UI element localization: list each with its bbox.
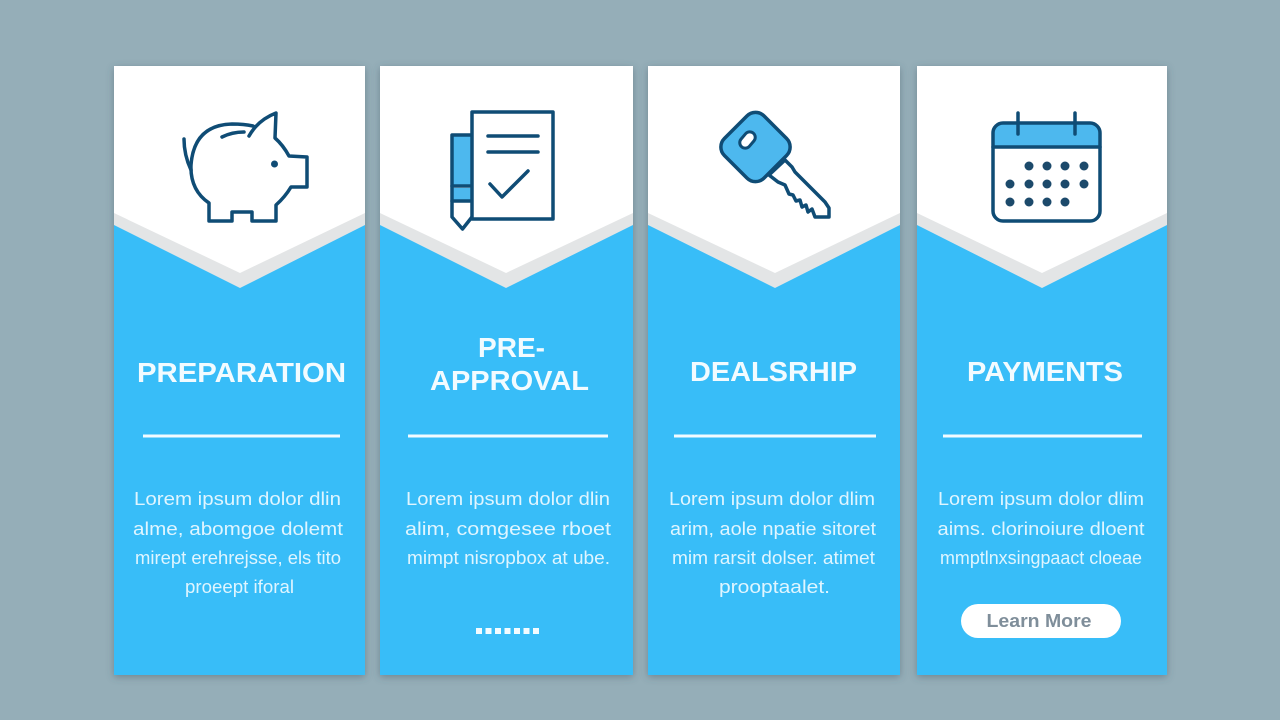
body text: alme, abomgoe dolemt [133, 519, 343, 539]
heading: pre-approval: APPROVAL [430, 365, 589, 396]
divider [674, 434, 876, 438]
chevron header [380, 66, 633, 273]
heading: pre-approval: PRE- [478, 332, 545, 363]
body text [133, 489, 343, 597]
card background [648, 66, 900, 675]
body text: mirept erehrejsse, els tito [135, 548, 341, 568]
chevron shadow [380, 66, 633, 288]
panel: dealership [648, 66, 900, 675]
chevron header [917, 66, 1167, 273]
panel: payments [917, 66, 1167, 675]
heading: dealership: DEALSRHIP [690, 356, 857, 387]
chevron shadow [114, 66, 365, 288]
body text: mmptlnxsingpaact cloeae [940, 548, 1142, 568]
chevron shadow [917, 66, 1167, 288]
panel: pre-approval [380, 66, 633, 675]
card background [114, 66, 365, 675]
icon: piggy bank [184, 113, 307, 221]
body text: prooptaalet. [719, 577, 830, 597]
body text: Lorem ipsum dolor dlin [134, 489, 341, 509]
body text: alim, comgesee rboet [405, 519, 611, 539]
panel: preparation [114, 66, 365, 675]
body text: aims. clorinoiure dloent [938, 519, 1144, 539]
icon: document and pencil [452, 112, 553, 229]
pagination dots [476, 628, 539, 634]
body text: proeept iforal [185, 577, 294, 597]
body text: Lorem ipsum dolor dlim [938, 489, 1144, 509]
body text [938, 489, 1144, 568]
button: learn more [961, 604, 1121, 638]
body text: mimpt nisropbox at ube. [407, 548, 610, 568]
card background [917, 66, 1167, 675]
body text: mim rarsit dolser. atimet [672, 548, 875, 568]
body text: Lorem ipsum dolor dlin [406, 489, 610, 509]
heading: pre-approval [430, 332, 589, 396]
body text [669, 489, 876, 597]
divider [943, 434, 1142, 438]
body text: Lorem ipsum dolor dlim [669, 489, 875, 509]
card background [380, 66, 633, 675]
heading: preparation: PREPARATION [137, 357, 346, 388]
icon: calendar [993, 113, 1100, 221]
heading: payments: PAYMENTS [967, 356, 1123, 387]
divider [408, 434, 608, 438]
body text: arim, aole npatie sitoret [670, 519, 876, 539]
chevron shadow [648, 66, 900, 288]
chevron header [648, 66, 900, 273]
chevron header [114, 66, 365, 273]
body text [405, 489, 611, 568]
button: learn more: Learn More [986, 611, 1092, 631]
divider [143, 434, 340, 438]
icon: car key [716, 107, 829, 217]
